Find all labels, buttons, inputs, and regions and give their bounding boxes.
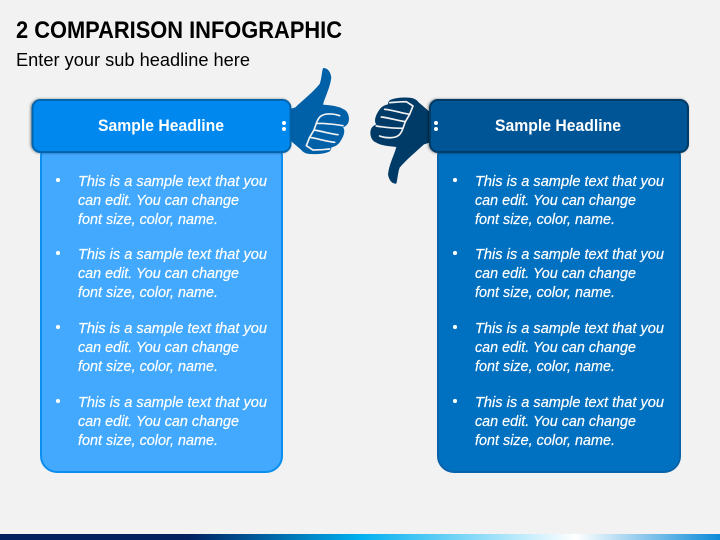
text block: left items: font size, color, name. [78, 359, 218, 375]
text block: right items: This is a sample text that you [475, 247, 664, 263]
text block: left items: font size, color, name. [78, 212, 218, 228]
text block: right items: This is a sample text that you [475, 174, 664, 190]
panel: left body [41, 140, 282, 472]
text block: right items: can edit. You can change [475, 266, 636, 282]
panel: right header [430, 100, 688, 152]
text block: right items: font size, color, name. [475, 359, 615, 375]
icon: thumbs up [287, 68, 349, 154]
text block: left items: can edit. You can change [78, 340, 239, 356]
text block: left items: This is a sample text that you [78, 321, 267, 337]
text block: left items: This is a sample text that you [78, 174, 267, 190]
text block: left items: This is a sample text that you [78, 395, 267, 411]
title: 2 COMPARISON INFOGRAPHIC [16, 17, 342, 44]
icon: thumbs down [370, 98, 433, 184]
text block: right items: can edit. You can change [475, 193, 636, 209]
text block: right items: This is a sample text that you [475, 321, 664, 337]
text block: left items: can edit. You can change [78, 414, 239, 430]
subtitle: Enter your sub headline here [16, 50, 250, 70]
text block: left items [56, 174, 267, 449]
text block: left items: can edit. You can change [78, 266, 239, 282]
footer gradient bar [0, 534, 720, 540]
text block: right items: can edit. You can change [475, 340, 636, 356]
text block: left items: font size, color, name. [78, 433, 218, 449]
text block: right items: font size, color, name. [475, 212, 615, 228]
right headline: Sample Headline [495, 116, 621, 135]
left headline: Sample Headline [98, 116, 224, 135]
left dots [282, 121, 286, 131]
text block: right items: font size, color, name. [475, 433, 615, 449]
right dots [434, 121, 438, 131]
text block: left items: can edit. You can change [78, 193, 239, 209]
text block: right items: font size, color, name. [475, 285, 615, 301]
panel: left header [32, 100, 290, 152]
text block: right items: can edit. You can change [475, 414, 636, 430]
text block: left items: This is a sample text that you [78, 247, 267, 263]
text block: left items: font size, color, name. [78, 285, 218, 301]
panel: right body [438, 140, 680, 472]
text block: right items [453, 174, 664, 449]
text block: right items: This is a sample text that you [475, 395, 664, 411]
